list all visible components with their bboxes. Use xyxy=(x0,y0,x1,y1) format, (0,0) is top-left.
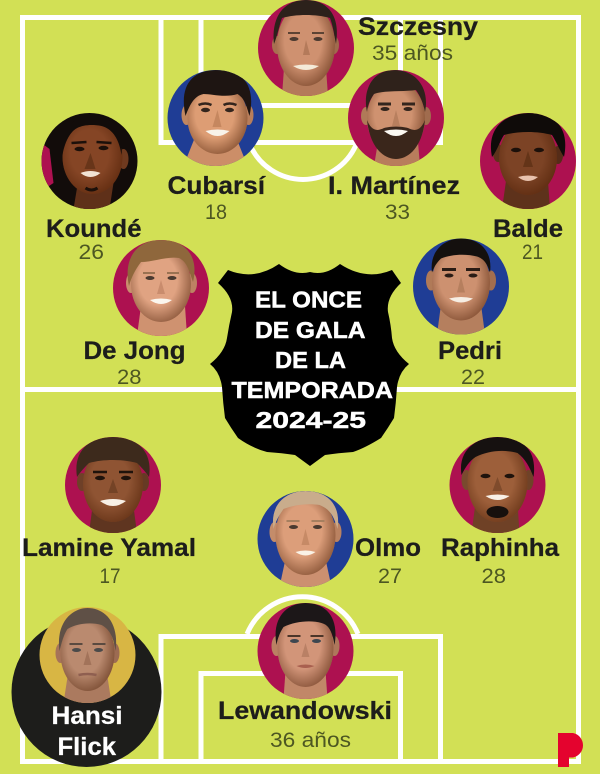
name: Hansi: Hansi xyxy=(52,702,122,730)
name: De Jong: De Jong xyxy=(84,337,186,365)
age: De Jong: 28 xyxy=(117,365,142,389)
coach badge xyxy=(12,617,162,767)
name: Koundé: Koundé xyxy=(46,215,142,243)
title line 3: DE LA xyxy=(275,347,346,373)
photo: Koundé xyxy=(42,113,138,209)
name: Cubarsí: Cubarsí xyxy=(168,172,266,200)
photo: Szczesny xyxy=(258,0,354,96)
age: Szczesny: 35 años xyxy=(372,41,453,65)
name: Balde: Balde xyxy=(493,215,563,243)
player: Lewandowski xyxy=(218,603,392,752)
name: Lamine Yamal: Lamine Yamal xyxy=(22,534,196,562)
title line 1: EL ONCE xyxy=(255,286,362,312)
photo: Hansi Flick xyxy=(40,607,136,703)
player: Pedri xyxy=(413,238,509,389)
name: I. Martínez: I. Martínez xyxy=(328,172,460,200)
photo: Balde xyxy=(480,113,576,209)
player: Olmo xyxy=(258,491,421,588)
name: Szczesny: Szczesny xyxy=(358,13,478,41)
name: Raphinha: Raphinha xyxy=(441,534,560,562)
name: Pedri: Pedri xyxy=(438,337,502,365)
logo: P xyxy=(558,733,583,767)
player: Koundé xyxy=(42,113,142,264)
player: I. Martínez xyxy=(328,70,460,224)
age: Raphinha: 28 xyxy=(482,564,506,588)
photo: Olmo xyxy=(258,491,354,587)
photo: Lamine Yamal xyxy=(65,437,161,533)
age: Lamine Yamal: 17 xyxy=(100,564,120,588)
name: Lewandowski: Lewandowski xyxy=(218,697,392,725)
player: Lamine Yamal xyxy=(22,437,196,588)
age: Lewandowski: 36 años xyxy=(270,728,351,752)
age: I. Martínez: 33 xyxy=(385,200,410,224)
photo: I. Martínez xyxy=(348,70,444,166)
age: Pedri: 22 xyxy=(461,365,485,389)
title line 5: 2024-25 xyxy=(256,407,366,433)
photo: Cubarsí xyxy=(168,70,264,166)
player: Cubarsí xyxy=(168,70,266,224)
name: Olmo: Olmo xyxy=(355,534,421,562)
shield shape xyxy=(210,264,409,466)
player: Szczesny xyxy=(258,0,478,96)
photo: Raphinha xyxy=(450,437,546,533)
age: Koundé: 26 xyxy=(78,240,104,264)
photo: Lewandowski xyxy=(258,603,354,699)
age: Cubarsí: 18 xyxy=(205,200,227,224)
name: Flick: Flick xyxy=(58,733,116,761)
title line 2: DE GALA xyxy=(255,317,366,343)
player: Balde xyxy=(480,113,576,264)
age: Olmo: 27 xyxy=(378,564,402,588)
age: Balde: 21 xyxy=(522,240,543,264)
shield title xyxy=(210,264,409,466)
player: Raphinha xyxy=(441,437,560,588)
photo: De Jong xyxy=(113,240,209,336)
coach: Hansi Flick xyxy=(12,607,162,767)
title line 4: TEMPORADA xyxy=(232,377,393,403)
player: De Jong xyxy=(84,240,209,389)
photo: Pedri xyxy=(413,238,509,334)
